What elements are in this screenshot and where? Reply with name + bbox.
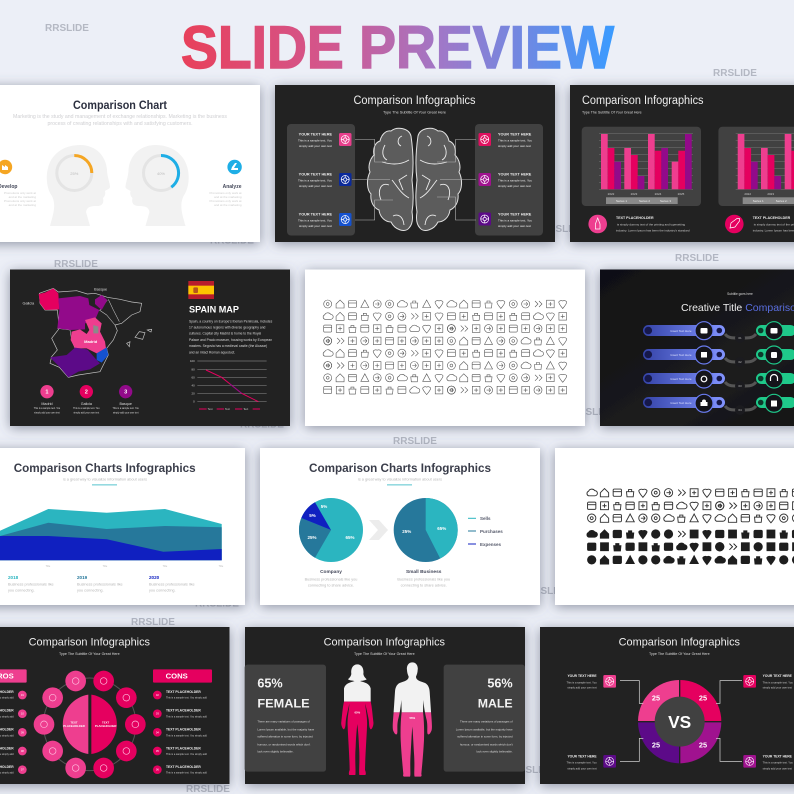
radial diagram: TEXT	[70, 720, 78, 724]
watermarks: RRSLIDE	[195, 598, 239, 610]
bar chart 1: Series 2	[639, 199, 650, 203]
line chart	[190, 359, 267, 411]
left text panel: YOUR TEXT HERE	[299, 132, 332, 136]
watermarks: RRSLIDE	[393, 436, 437, 447]
left text panel: This is a sample text. You	[298, 218, 332, 222]
pros list: 01	[21, 693, 24, 697]
spain text: 17 autonomous regions with diverse geography and	[189, 325, 266, 329]
top left item: simply add your own text	[567, 686, 597, 690]
year notes: you connecting.	[8, 588, 35, 592]
basque region	[95, 295, 107, 310]
male panel: suffered alteration in some form, by injected	[457, 735, 513, 739]
year notes: Business professionals like	[8, 582, 54, 586]
panel: outline icon grid slide	[305, 270, 585, 426]
map of spain	[22, 288, 152, 377]
right text panel: simply add your own text	[498, 144, 531, 148]
panel: pros and cons slide: Type The Subtitle Of Your Great Here	[59, 652, 120, 656]
panel: versus donut slide: Comparison Infographics	[619, 636, 740, 648]
pie legend	[468, 516, 503, 547]
year notes: Business professionals like	[149, 582, 195, 586]
bottom left item: simply add your own text	[567, 766, 597, 770]
panel: area chart slide	[0, 448, 245, 605]
female panel: Lorem Ipsum available, but the majority have	[257, 727, 315, 731]
left text panel: This is a sample text. You	[298, 138, 332, 142]
cons list: 04	[156, 730, 159, 734]
panel: comparison chart heads slide: process of creating relationships with and satisfying customers.	[47, 121, 193, 127]
pie small business: 65%	[437, 526, 446, 531]
panel: comparison chart heads slide: Marketing is the study and management of exchange relationships. Marketing is the business	[13, 114, 227, 120]
numbered regions: simply add your own text	[113, 411, 139, 414]
panel: creative title comparison slide	[600, 270, 794, 426]
spain text: cultures. Capital city Madrid is home to the Royal	[189, 331, 261, 335]
panel: versus donut slide	[540, 627, 794, 784]
radial diagram: PLACEHOLDER	[63, 724, 85, 728]
bar chart 2: Series 1	[753, 199, 764, 203]
numbered regions: 2	[85, 390, 88, 396]
line chart: 40	[192, 383, 195, 387]
female panel	[245, 665, 326, 772]
row 2	[643, 346, 794, 367]
bottom left item: YOUR TEXT HERE	[567, 755, 597, 759]
left head with donut: 25%	[70, 171, 79, 176]
cons list: TEXT PLACEHOLDER	[166, 728, 201, 732]
connectors	[620, 681, 742, 761]
spain text: Spain, a country on Europe's Iberian Peninsula, includes	[189, 319, 273, 323]
bottom right item	[743, 755, 793, 770]
numbered regions: 1	[45, 390, 49, 396]
row 3: Insert Text Here	[670, 377, 692, 381]
murcia region	[97, 347, 108, 363]
bottom right item: simply add your own text	[763, 766, 792, 770]
castilla region	[57, 296, 99, 330]
rocket icon placeholder 1: industry. Lorem Ipsum has been the industry's standard	[616, 228, 690, 232]
rocket icon placeholder 1: TEXT PLACEHOLDER	[616, 216, 654, 220]
cons list: TEXT PLACEHOLDER	[166, 765, 201, 769]
bar chart 2	[718, 127, 794, 206]
radial diagram	[34, 671, 146, 778]
male figure	[393, 662, 432, 777]
spain text: Palace and Prado museum, housing works by European	[189, 338, 272, 342]
pie company	[299, 498, 363, 588]
watermarks: RRSLIDE	[45, 23, 89, 34]
left text panel: simply add your own text	[299, 144, 332, 148]
panel: pie chart slide: is a great way to visualize information about users	[358, 478, 442, 482]
top left item: This is a sample text. You	[567, 680, 597, 684]
cons list: 05	[156, 749, 159, 753]
spain text: SPAIN MAP	[189, 305, 239, 315]
pie small business: Business professionals like you	[397, 578, 450, 582]
area chart	[0, 509, 224, 568]
bar chart 2: Series 2	[776, 199, 787, 203]
pie company: 5%	[309, 513, 316, 518]
left text panel: simply add your own text	[299, 224, 332, 228]
cons list: This is a sample text. You simply add	[166, 715, 207, 718]
develop block: Promotions only work at	[4, 191, 36, 195]
top right item: simply add your own text	[763, 686, 792, 690]
area chart: Title	[163, 565, 168, 568]
right text panel: simply add your own text	[498, 224, 531, 228]
analyze block: Promotions only work at	[209, 191, 242, 195]
row 4: Insert Text Here	[670, 401, 692, 405]
map of spain: Galicia	[22, 302, 35, 306]
female figure	[341, 664, 373, 775]
title: SLIDE PREVIEW	[181, 14, 614, 81]
spanish flag	[188, 281, 214, 299]
numbered regions: 3	[124, 390, 127, 396]
year notes: you connecting.	[149, 588, 176, 592]
panel: pros and cons slide: Comparison Infographics	[29, 636, 150, 648]
left text panel: This is a sample text. You	[298, 178, 332, 182]
top left item	[567, 674, 616, 690]
pie company: 25%	[307, 535, 317, 540]
top right item: This is a sample text. You	[763, 680, 793, 684]
line chart: 20	[192, 392, 195, 396]
bar chart 1: 2022	[608, 192, 615, 196]
spain text: masters. Segovia has a medieval castle (the Alcazar)	[189, 344, 267, 348]
numbered regions: This is a sample text. You	[73, 407, 100, 410]
spain text	[189, 305, 273, 354]
row 4	[643, 394, 794, 415]
radial diagram: PLACEHOLDER	[95, 724, 116, 728]
panel: female male slide: Comparison Infographics	[324, 636, 445, 648]
cons list: 06	[156, 768, 159, 772]
pie company: 65%	[345, 535, 355, 540]
row 3: 03	[738, 384, 742, 388]
map of spain: Basque	[94, 288, 107, 292]
panel: comparison chart heads slide	[0, 85, 260, 242]
rocket icon placeholder 1: is simply dummy text of the printing and typesetting	[617, 222, 685, 226]
watermarks: RRSLIDE	[675, 253, 719, 264]
numbered regions: simply add your own text	[74, 411, 99, 414]
map of spain: Madrid	[84, 339, 98, 344]
bar chart 1: Series 1	[616, 199, 627, 203]
right text panel: YOUR TEXT HERE	[498, 172, 532, 176]
male panel	[444, 665, 525, 772]
left text panel	[287, 124, 355, 236]
pros list	[0, 690, 27, 775]
year notes: Business professionals like	[77, 582, 123, 586]
bar chart 1: Series 3	[660, 199, 671, 203]
rocket icon placeholder 2: TEXT PLACEHOLDER	[753, 216, 791, 220]
right head with donut: 40%	[157, 171, 165, 176]
year notes: 2020	[149, 575, 160, 580]
right text panel: This is a sample text. You	[498, 138, 532, 142]
pie company: Business professionals like you	[305, 578, 357, 582]
line chart: Text	[225, 407, 230, 411]
row 1: 01	[738, 336, 742, 340]
watermarks: RRSLIDE	[571, 407, 615, 418]
female panel: There are many variations of passages of	[257, 720, 310, 724]
right head with donut	[126, 145, 189, 226]
analyze block: and at the marketing	[214, 195, 242, 199]
panel: area chart slide: Comparison Charts Infographics	[14, 461, 196, 475]
cons list: TEXT PLACEHOLDER	[166, 709, 201, 713]
area chart: Title	[46, 565, 51, 568]
bar chart 2: 2022	[744, 192, 751, 196]
panel: pie chart slide	[260, 448, 540, 605]
filled icon rows	[587, 530, 794, 565]
cons header: CONS	[166, 672, 188, 681]
panel: comparison chart heads slide: Comparison Chart	[73, 98, 167, 112]
develop block: and at the marketing	[9, 195, 36, 199]
female panel: 65%	[257, 676, 283, 690]
left text panel: simply add your own text	[299, 184, 332, 188]
pie legend: Purchases	[480, 529, 503, 534]
watermarks: RRSLIDE	[131, 617, 175, 628]
pie legend: Expenses	[480, 542, 502, 547]
galicia region	[39, 288, 59, 310]
donut chart: 25	[652, 741, 660, 750]
donut chart: VS	[668, 712, 691, 732]
male panel: Lorem Ipsum available, but the majority have	[456, 727, 513, 731]
panel: pros and cons slide	[0, 627, 230, 784]
row 1: Insert Text Here	[670, 329, 692, 333]
numbered regions: Madrid	[41, 402, 53, 406]
male figure: 56%	[409, 716, 416, 720]
pros list: 07	[21, 768, 24, 772]
connectors	[352, 140, 476, 220]
right text panel: simply add your own text	[498, 184, 531, 188]
bar chart 1: 2024	[655, 192, 662, 196]
panel: versus donut slide: Type The Subtitle Of Your Great Here	[649, 652, 710, 656]
cons list: This is a sample text. You simply add	[166, 772, 207, 775]
bar chart 1: 2023	[631, 192, 638, 196]
top right item	[743, 674, 793, 690]
cons list: This is a sample text. You simply add	[166, 734, 207, 737]
line chart: 100	[190, 359, 195, 363]
male panel: humour, or randomised words which don't	[460, 742, 513, 746]
pie small business: 25%	[402, 529, 411, 534]
madrid region	[71, 317, 106, 353]
pie company: 5%	[321, 504, 327, 509]
row 3	[643, 370, 794, 391]
male panel: MALE	[478, 697, 513, 711]
line chart: 80	[192, 367, 195, 371]
panel: spain map slide	[10, 270, 290, 426]
spain text: and an intact Roman aqueduct.	[189, 350, 235, 354]
line chart: 0	[193, 400, 195, 404]
pie small business	[394, 498, 458, 588]
row 2: 02	[738, 360, 742, 364]
pie company: connecting to share advice.	[308, 584, 354, 588]
cons list: This is a sample text. You simply add	[166, 697, 207, 700]
male panel: 56%	[487, 676, 513, 690]
bar chart 2: 2023	[767, 192, 774, 196]
year notes: you connecting.	[77, 588, 104, 592]
develop block	[0, 160, 36, 207]
analyze block: Analyze	[223, 184, 242, 190]
andalusia region	[50, 348, 100, 377]
bottom left item: This is a sample text. You	[567, 761, 597, 765]
top left item: YOUR TEXT HERE	[567, 674, 597, 678]
numbered regions: simply add your own text	[34, 411, 60, 414]
pie legend: Sells	[480, 516, 491, 521]
panel: bar chart slide: Comparison Infographics	[582, 95, 704, 107]
area chart: Title	[103, 565, 108, 568]
panel: bar chart slide: Type The Subtitle Of Your Great Here	[582, 110, 642, 114]
donut chart: 25	[699, 741, 707, 750]
brain illustration	[367, 128, 462, 230]
male panel: look even slightly believable.	[476, 750, 513, 754]
cons list: TEXT PLACEHOLDER	[166, 690, 201, 694]
row 2: Insert Text Here	[670, 353, 692, 357]
numbered regions: Basque	[119, 402, 132, 406]
right text panel: YOUR TEXT HERE	[498, 212, 532, 216]
left text panel: YOUR TEXT HERE	[299, 172, 332, 176]
rocket icon placeholder 2	[725, 215, 794, 233]
outline icon rows	[587, 489, 794, 523]
panel: bar chart slide	[570, 85, 794, 242]
numbered regions: This is a sample text. You	[34, 407, 61, 410]
panel: area chart slide: is a great way to visualize information about users	[63, 478, 147, 482]
female panel: look even slightly believable.	[257, 750, 294, 754]
bottom right item: YOUR TEXT HERE	[763, 755, 793, 759]
numbered regions	[34, 385, 140, 414]
pie small business: Small Business	[406, 569, 442, 575]
year notes: 2019	[77, 575, 88, 580]
panel: creative title comparison slide: Subtitle goes here	[727, 292, 753, 296]
donut chart: 25	[699, 693, 707, 702]
panel: pie chart slide: Comparison Charts Infographics	[309, 461, 491, 475]
bar chart 1	[582, 127, 701, 206]
cons list	[153, 690, 207, 775]
bottom right item: This is a sample text. You	[763, 761, 793, 765]
area chart: Title	[219, 565, 224, 568]
develop block: Promotions only work at	[4, 199, 36, 203]
right text panel: YOUR TEXT HERE	[498, 132, 532, 136]
panel: brain comparison slide: Comparison Infographics	[354, 95, 476, 107]
pie small business: connecting to share advice.	[401, 584, 447, 588]
male panel: There are many variations of passages of	[460, 720, 513, 724]
cons list: This is a sample text. You simply add	[166, 753, 207, 756]
arrow between pies	[369, 520, 388, 540]
top right item: YOUR TEXT HERE	[763, 674, 793, 678]
pros list: 10	[21, 712, 24, 716]
donut chart: 25	[652, 693, 660, 702]
pros list: 08	[21, 749, 24, 753]
radial diagram: TEXT	[102, 720, 110, 724]
bottom left item	[567, 755, 616, 770]
year notes: 2018	[8, 575, 19, 580]
analyze block	[209, 160, 242, 207]
cons list: TEXT PLACEHOLDER	[166, 746, 201, 750]
female panel: humour, or randomised words which don't	[257, 742, 310, 746]
analyze block: and at the marketing	[214, 203, 242, 207]
analyze block: Promotions only work at	[209, 199, 242, 203]
cons header	[153, 669, 212, 683]
right text panel	[475, 124, 543, 236]
watermarks: RRSLIDE	[240, 420, 284, 430]
develop block: and at the marketing	[9, 203, 36, 207]
right text panel: This is a sample text. You	[498, 218, 532, 222]
watermarks: RRSLIDE	[526, 586, 570, 597]
left text panel: YOUR TEXT HERE	[299, 212, 332, 216]
line chart: Text	[208, 407, 213, 411]
left head with donut	[47, 145, 110, 226]
watermarks: RRSLIDE	[541, 224, 585, 235]
row 4: 04	[738, 408, 742, 412]
panel: brain comparison slide	[275, 85, 555, 242]
watermarks: RRSLIDE	[713, 68, 757, 79]
line chart: Text	[243, 407, 248, 411]
panel: medical icon grid slide	[555, 448, 794, 605]
cons list: 02	[156, 693, 159, 697]
female panel: FEMALE	[257, 697, 310, 711]
numbered regions: Galicia	[81, 402, 93, 406]
donut chart	[638, 680, 721, 763]
pie company: Company	[320, 569, 342, 575]
row 1	[643, 322, 794, 343]
pros list: 09	[21, 730, 24, 734]
numbered regions: This is a sample text. You	[112, 407, 140, 410]
pros header	[0, 669, 27, 683]
panel: brain comparison slide: Type The Subtitle Of Your Great Here	[383, 110, 446, 114]
rocket icon placeholder 1	[588, 215, 690, 233]
watermarks: RRSLIDE	[210, 236, 254, 246]
panel: female male slide: Type The Subtitle Of Your Great Here	[354, 652, 415, 656]
female panel: suffered alteration in some form, by injected	[257, 735, 313, 739]
line chart: 60	[192, 375, 195, 379]
cons list: 03	[156, 712, 159, 716]
year notes	[8, 575, 195, 592]
watermarks: RRSLIDE	[511, 765, 555, 776]
watermarks: RRSLIDE	[54, 259, 98, 270]
female figure: 65%	[354, 711, 361, 715]
bar chart 1: 2025	[678, 192, 685, 196]
right text panel: This is a sample text. You	[498, 178, 532, 182]
panel: female male slide	[245, 627, 525, 784]
